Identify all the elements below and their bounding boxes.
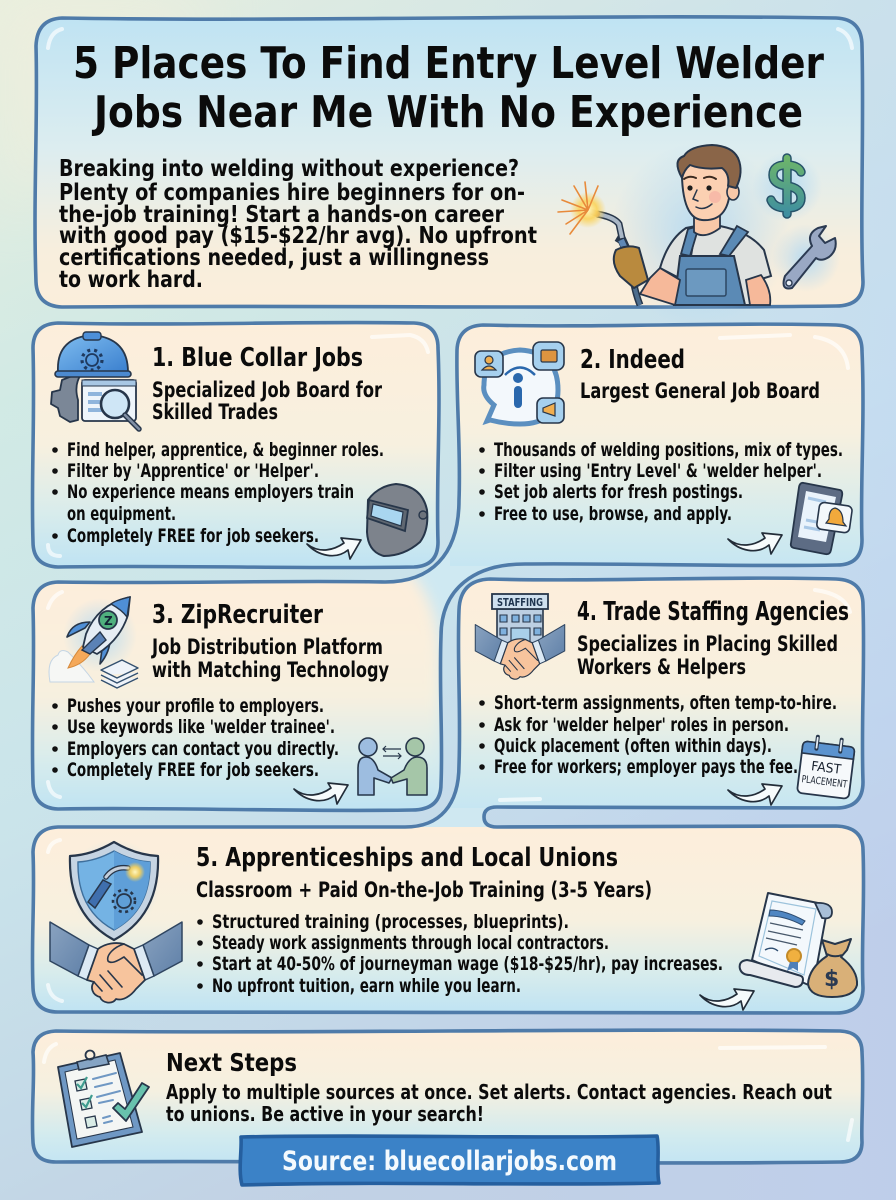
bullet list: Steady work assignments through local contractors. xyxy=(212,932,609,954)
intro text: Plenty of companies hire beginners for on- xyxy=(59,180,525,206)
subheading xyxy=(577,632,838,679)
bullet list: Start at 40-50% of journeyman wage ($18-$25/hr), pay increases. xyxy=(212,953,723,975)
icon: money bag: $ xyxy=(824,967,839,992)
icon: rocket with documents: Z xyxy=(104,614,113,628)
intro text: Breaking into welding without experience? xyxy=(59,156,519,182)
icon: wrench xyxy=(772,224,840,292)
icon: shield with torch and handshake xyxy=(50,839,182,1003)
bullet list xyxy=(52,695,339,781)
bullet list: No experience means employers train xyxy=(67,481,354,503)
icon: Indeed chat bubbles xyxy=(475,342,564,424)
panel: 1. Blue Collar Jobs xyxy=(32,323,439,568)
heading: 1. Blue Collar Jobs xyxy=(152,343,363,373)
subheading: Workers & Helpers xyxy=(577,655,746,679)
bullet list: Employers can contact you directly. xyxy=(67,738,339,760)
subheading: Specialized Job Board for xyxy=(152,378,382,402)
bullet list: Find helper, apprentice, & beginner roles. xyxy=(67,439,384,461)
subheading: Skilled Trades xyxy=(152,400,278,424)
heading: Next Steps xyxy=(166,1048,297,1077)
bullet list: Pushes your profile to employers. xyxy=(67,695,324,717)
source badge xyxy=(240,1136,659,1185)
subheading: Classroom + Paid On-the-Job Training (3-5 Years) xyxy=(196,878,652,902)
icon: two people shaking hands xyxy=(358,738,427,795)
bullet list: Use keywords like 'welder trainee'. xyxy=(67,716,335,738)
arrow xyxy=(294,783,348,804)
intro text: with good pay ($15-$22/hr avg). No upfront xyxy=(59,223,537,249)
intro text: certifications needed, just a willingness xyxy=(59,245,489,271)
icon: money bag xyxy=(808,939,857,997)
intro text: the-job training! Start a hands-on career xyxy=(59,202,505,228)
icon: fast placement calendar xyxy=(797,735,856,799)
bullet list: Completely FREE for job seekers. xyxy=(67,525,319,547)
heading: 3. ZipRecruiter xyxy=(152,600,323,630)
subheading xyxy=(150,635,389,682)
bullet list: Free to use, browse, and apply. xyxy=(494,503,732,525)
title xyxy=(73,38,824,138)
bullet list: No upfront tuition, earn while you learn. xyxy=(212,975,521,997)
bullet list: Filter by 'Apprentice' or 'Helper'. xyxy=(67,460,319,482)
body text: to unions. Be active in your search! xyxy=(166,1102,484,1126)
arrow xyxy=(700,989,754,1010)
icon: diploma scroll xyxy=(740,893,832,987)
icon: phone with alert xyxy=(791,483,853,554)
subheading: Job Distribution Platform xyxy=(150,635,383,659)
panel: header xyxy=(35,17,863,327)
icon: welding mask xyxy=(367,484,427,556)
subheading xyxy=(152,378,382,424)
panel: 2. Indeed and 3. ZipRecruiter xyxy=(10,310,880,830)
icon: fast placement calendar: FAST xyxy=(810,759,842,778)
heading: 5. Apprenticeships and Local Unions xyxy=(196,843,618,873)
icon: welder with torch xyxy=(558,143,790,327)
bullet list: Structured training (processes, blueprints). xyxy=(212,911,569,933)
icon: dollar sign xyxy=(752,152,822,222)
subheading: Largest General Job Board xyxy=(580,379,820,403)
arrow xyxy=(728,784,782,805)
arrow xyxy=(307,538,361,559)
icon: staffing building with handshake: STAFFING xyxy=(497,597,543,609)
icon: helmet, gear and search window xyxy=(51,332,139,429)
body text xyxy=(166,1080,832,1126)
heading: 2. Indeed xyxy=(580,345,685,375)
bullet list xyxy=(479,692,837,778)
icon: rocket with documents xyxy=(49,597,138,688)
bullet list xyxy=(52,439,384,547)
bullet list: on equipment. xyxy=(67,503,176,525)
bullet list: Set job alerts for fresh postings. xyxy=(494,481,743,503)
bullet list: Completely FREE for job seekers. xyxy=(67,759,319,781)
icon: clipboard checklist xyxy=(58,1050,149,1147)
subheading: with Matching Technology xyxy=(152,658,389,682)
intro text: to work hard. xyxy=(59,267,203,293)
arrow xyxy=(728,533,782,554)
bullet list xyxy=(197,911,723,997)
intro text xyxy=(59,156,537,293)
panel: next steps xyxy=(32,1030,863,1163)
icon: staffing building with handshake xyxy=(475,594,565,679)
panel: 4. Trade Staffing Agencies and 5. Apprenticeships xyxy=(20,560,880,1027)
source badge: Source: bluecollarjobs.com xyxy=(282,1146,617,1177)
bullet list xyxy=(479,439,843,525)
bullet list: Quick placement (often within days). xyxy=(494,735,772,757)
icon: fast placement calendar: PLACEMENT xyxy=(801,774,849,791)
